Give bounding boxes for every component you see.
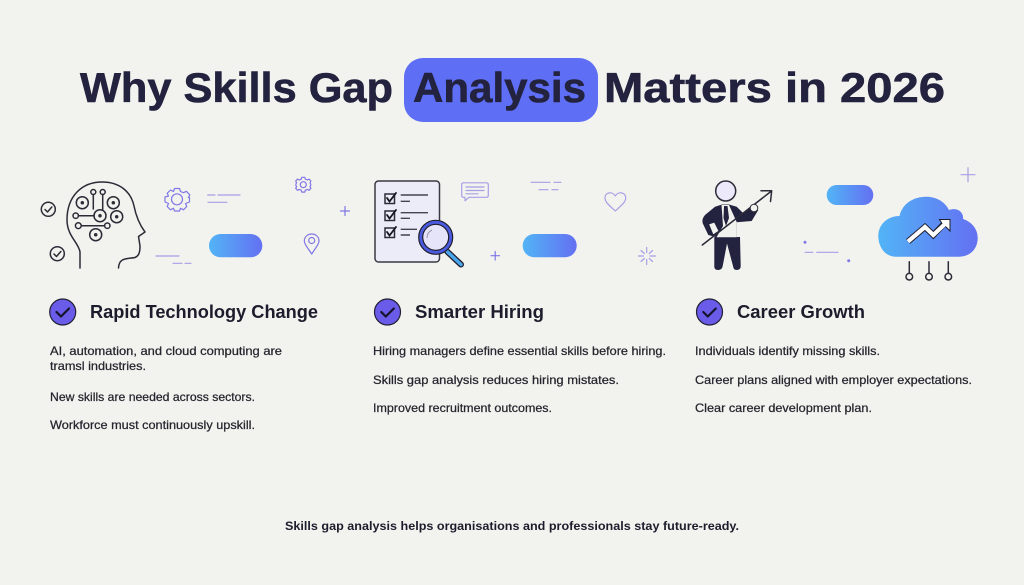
icon: head with circuit brain	[67, 182, 145, 268]
icon: checklist clipboard	[375, 181, 440, 262]
title text: Why Skills Gap: Why Skills Gap	[80, 64, 393, 111]
text block	[695, 344, 972, 415]
icon: large gear	[165, 188, 190, 211]
title text: Matters in 2026: Matters in 2026	[604, 64, 945, 111]
icon: heading check badge	[50, 299, 76, 325]
text block: Clear career development plan.	[695, 401, 872, 415]
text block: AI, automation, and cloud computing are	[50, 344, 282, 358]
icon: heading check badge	[696, 299, 722, 325]
icon: check circle lower	[50, 247, 64, 261]
icon: magnifying glass	[419, 220, 461, 264]
title	[80, 58, 945, 122]
icon: plus	[491, 252, 500, 260]
gradient pill	[827, 185, 873, 205]
footer statement: Skills gap analysis helps organisations and professionals stay future-ready.	[285, 519, 739, 533]
icon: cloud connectors	[906, 262, 952, 280]
title highlight pill	[404, 58, 598, 122]
decorative dashes	[156, 195, 240, 263]
heading: Rapid Technology Change: Rapid Technology Change	[90, 302, 318, 322]
icon: small gear	[296, 177, 311, 192]
icon: plus	[961, 168, 975, 182]
icon: cloud with growth arrow	[878, 197, 978, 257]
icon: check circle upper	[41, 202, 55, 216]
text block: Improved recruitment outcomes.	[373, 401, 552, 415]
text block: New skills are needed across sectors.	[50, 390, 255, 404]
icon: businessman with rising arrow	[702, 181, 772, 270]
icon: location pin	[304, 234, 319, 254]
gradient pill	[209, 234, 262, 257]
heading: Career Growth: Career Growth	[737, 302, 865, 322]
icon: sparkle	[638, 248, 656, 264]
text block: Career plans aligned with employer expectations.	[695, 373, 972, 387]
heading: Smarter Hiring: Smarter Hiring	[415, 302, 544, 322]
text block	[50, 344, 282, 432]
text block: Skills gap analysis reduces hiring mistates.	[373, 373, 619, 387]
icon: plus	[340, 206, 350, 216]
icon: heading check badge	[374, 299, 400, 325]
text block: Workforce must continuously upskill.	[50, 418, 255, 432]
text block: Individuals identify missing skills.	[695, 344, 880, 358]
panel: smarter hiring	[373, 181, 666, 415]
title text: Analysis: Analysis	[413, 64, 586, 111]
text block	[373, 344, 666, 415]
decorative dots and dashes	[804, 241, 850, 262]
panel: career growth	[695, 168, 978, 415]
text block: Hiring managers define essential skills before hiring.	[373, 344, 666, 358]
text block: tramsl industries.	[50, 359, 146, 373]
panel: rapid technology change	[41, 177, 350, 432]
decorative dashes	[531, 182, 561, 190]
gradient pill	[523, 234, 577, 257]
icon: speech bubble	[462, 183, 488, 201]
icon: heart	[605, 193, 626, 211]
